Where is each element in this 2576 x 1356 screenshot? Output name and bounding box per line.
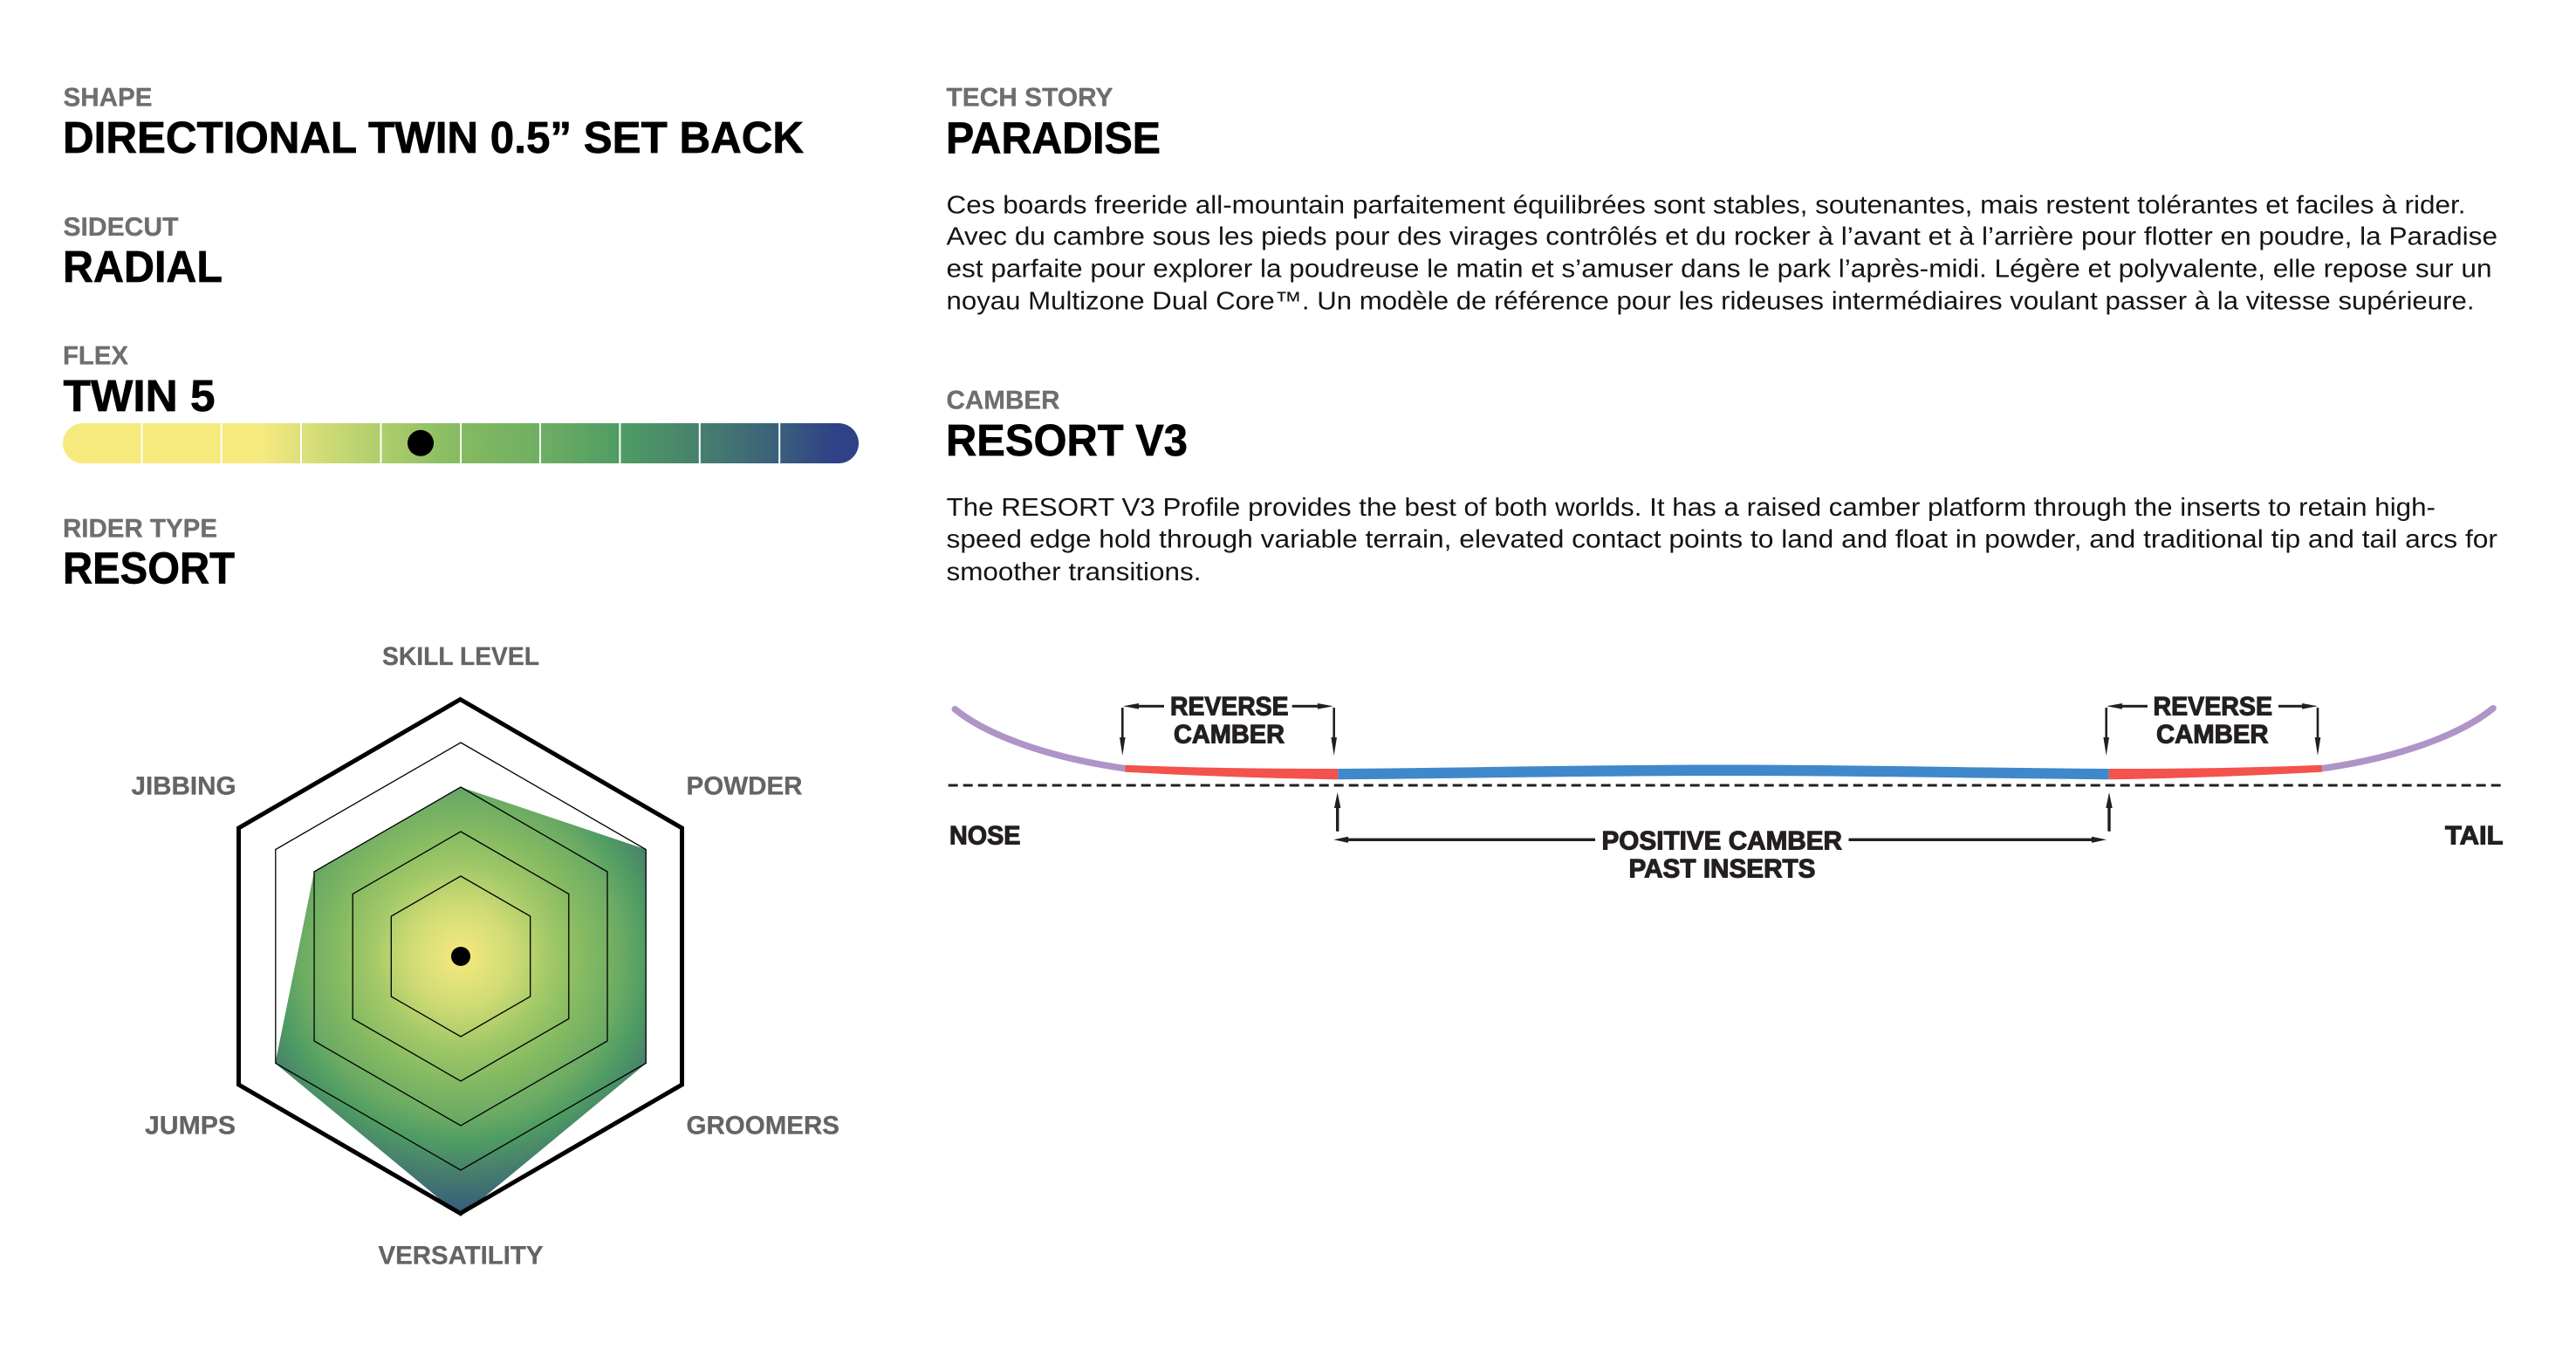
baseline dashed (949, 784, 2501, 787)
axis label jibbing: JIBBING (131, 772, 236, 801)
nose curve (955, 709, 1125, 769)
axis label skill level: SKILL LEVEL (382, 642, 539, 671)
tech story paragraph: Avec du cambre sous les pieds pour des virages contrôlés et du rocker à l’avant et à l’arrière pour flotter en poudre, la Paradise (946, 223, 2497, 251)
tail label: TAIL (2445, 822, 2503, 850)
left reverse camber label (1170, 692, 1288, 749)
radar center dot (451, 947, 470, 966)
camber profile diagram (949, 692, 2503, 883)
flex value: TWIN 5 (63, 371, 215, 421)
tail curve (2322, 709, 2493, 769)
tech story paragraph: Ces boards freeride all-mountain parfaitement équilibrées sont stables, soutenantes, mais restent tolérantes et faciles à rider. (946, 191, 2466, 219)
tech story paragraph (946, 191, 2497, 315)
tech story section (946, 84, 2497, 315)
flex scale bar (63, 423, 859, 463)
camber paragraph (946, 494, 2497, 586)
axis label jumps: JUMPS (145, 1112, 236, 1140)
positive camber dimension arrows (1333, 792, 2113, 843)
sidecut label: SIDECUT (63, 213, 178, 242)
rider type spec block (63, 515, 235, 593)
left reverse camber label: CAMBER (1174, 720, 1285, 749)
shape label: SHAPE (63, 84, 152, 113)
right reverse camber label: REVERSE (2154, 692, 2272, 721)
camber paragraph: smoother transitions. (946, 558, 1201, 586)
right reverse camber band (2109, 765, 2322, 779)
radar grid rings (276, 743, 646, 1170)
tech story paragraph: est parfaite pour explorer la poudreuse le matin et s’amuser dans le park l’après-midi. Légère et polyvalente, elle repose sur un (946, 256, 2492, 284)
sidecut value: RADIAL (63, 242, 223, 291)
right reverse camber label: CAMBER (2156, 720, 2269, 749)
left reverse camber bracket (1120, 703, 1337, 756)
tech story title: PARADISE (946, 113, 1161, 162)
radar outer hexagon (239, 700, 682, 1213)
sidecut spec block (63, 213, 223, 291)
positive camber label: PAST INSERTS (1628, 854, 1815, 883)
shape spec block (63, 84, 804, 162)
radar data area (275, 787, 647, 1216)
left reverse camber label: REVERSE (1170, 692, 1288, 721)
positive camber band (1338, 764, 2109, 779)
positive camber label (1602, 826, 1842, 883)
axis label groomers: GROOMERS (686, 1112, 839, 1140)
axis label powder: POWDER (686, 772, 803, 801)
rider type label: RIDER TYPE (63, 515, 217, 544)
flex spec block (63, 341, 859, 463)
axis label versatility: VERSATILITY (379, 1241, 544, 1270)
tech story paragraph: noyau Multizone Dual Core™. Un modèle de référence pour les rideuses intermédiaires voulant passer à la vitesse supérieure. (946, 287, 2475, 315)
camber label: CAMBER (946, 386, 1060, 414)
flex label: FLEX (63, 341, 128, 370)
positive camber label: POSITIVE CAMBER (1602, 826, 1842, 855)
right reverse camber bracket (2103, 703, 2320, 756)
tech story label: TECH STORY (946, 84, 1113, 113)
radar chart (131, 642, 839, 1270)
flex marker dot (408, 430, 434, 456)
left reverse camber band (1125, 765, 1338, 779)
camber paragraph: The RESORT V3 Profile provides the best of both worlds. It has a raised camber platform through the inserts to retain high- (946, 494, 2436, 522)
nose label: NOSE (949, 822, 1021, 851)
camber title: RESORT V3 (946, 415, 1188, 465)
camber section (946, 386, 2497, 586)
shape value: DIRECTIONAL TWIN 0.5” SET BACK (63, 113, 804, 162)
right reverse camber label (2154, 692, 2272, 749)
camber paragraph: speed edge hold through variable terrain, elevated contact points to land and float in powder, and traditional tip and tail arcs for (946, 526, 2497, 554)
rider type value: RESORT (63, 543, 235, 593)
